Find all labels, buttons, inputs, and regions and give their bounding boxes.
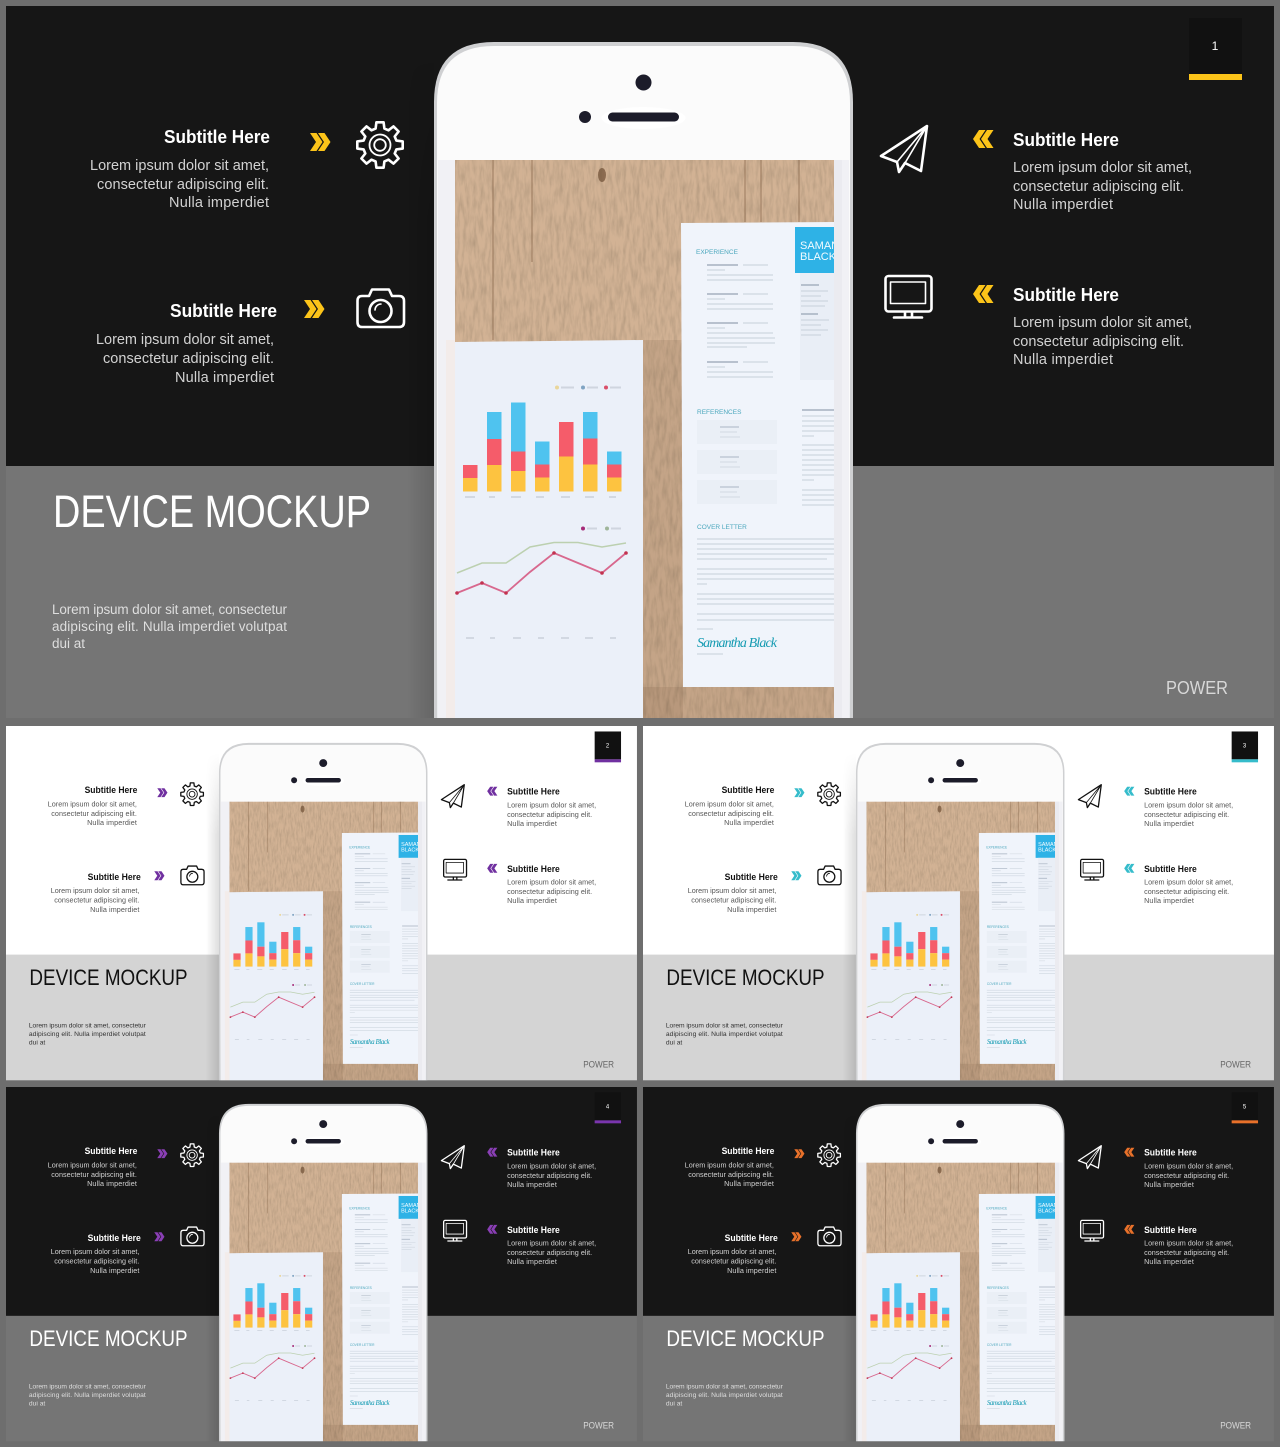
top dark band: [643, 1087, 1274, 1316]
feature: settings: Subtitle Here: [85, 1146, 137, 1156]
description: adipiscing elit. Nulla imperdiet volutpat: [29, 1031, 146, 1038]
brand label: POWER: [1166, 678, 1228, 698]
feature: settings: Nulla imperdiet: [87, 818, 137, 827]
feature: monitor: Subtitle Here: [1144, 864, 1197, 874]
feature: camera: [688, 866, 841, 914]
title: DEVICE MOCKUP: [53, 486, 371, 537]
page number tab: [1232, 731, 1258, 762]
description: adipiscing elit. Nulla imperdiet volutpat: [666, 1031, 783, 1038]
feature: monitor: Subtitle Here: [1144, 1225, 1197, 1235]
feature: monitor: Nulla imperdiet: [1144, 1257, 1194, 1266]
feature: settings: consectetur adipiscing elit.: [688, 809, 774, 818]
feature: camera: Lorem ipsum dolor sit amet,: [688, 1247, 776, 1256]
page number tab: [595, 731, 621, 762]
feature: paper plane: Nulla imperdiet: [507, 819, 557, 828]
feature: monitor: Nulla imperdiet: [1144, 896, 1194, 905]
page number tab: [1232, 1092, 1258, 1123]
phone mockup: [434, 42, 862, 722]
feature: settings: consectetur adipiscing elit.: [51, 809, 137, 818]
feature: camera: Lorem ipsum dolor sit amet,: [688, 886, 776, 895]
feature: paper plane: Subtitle Here: [1013, 130, 1119, 150]
bottom grey band: [643, 955, 1274, 1080]
brand label: POWER: [583, 1420, 615, 1430]
title: DEVICE MOCKUP: [666, 965, 825, 990]
description: adipiscing elit. Nulla imperdiet volutpat: [29, 1392, 146, 1399]
feature: monitor: consectetur adipiscing elit.: [507, 1248, 592, 1257]
panel: slide 1 large dark: [6, 6, 1274, 722]
feature: settings: Nulla imperdiet: [724, 1179, 774, 1188]
feature: camera: Lorem ipsum dolor sit amet,: [51, 886, 139, 895]
feature: settings: [48, 1144, 203, 1188]
description: dui at: [52, 636, 85, 651]
feature: monitor: [886, 276, 1192, 368]
description: [666, 1023, 784, 1046]
feature: camera: Subtitle Here: [725, 1233, 778, 1243]
feature: paper plane: consectetur adipiscing elit.: [507, 1171, 592, 1180]
feature: camera: consectetur adipiscing elit.: [103, 351, 274, 367]
feature: paper plane: [441, 1146, 596, 1189]
top dark band: [6, 6, 1274, 466]
phone mockup: [856, 743, 1069, 1081]
top white band: [6, 726, 637, 955]
feature: monitor: Lorem ipsum dolor sit amet,: [1013, 315, 1192, 331]
feature: settings: Subtitle Here: [722, 785, 774, 795]
feature: paper plane: Nulla imperdiet: [1144, 819, 1194, 828]
feature: camera: Nulla imperdiet: [727, 1266, 776, 1275]
panel: slide 5 dark orange: [643, 1087, 1274, 1442]
feature: monitor: consectetur adipiscing elit.: [1013, 334, 1184, 350]
bottom grey band: [643, 1316, 1274, 1441]
feature: monitor: Lorem ipsum dolor sit amet,: [507, 878, 596, 887]
feature: paper plane: consectetur adipiscing elit.: [1144, 1171, 1229, 1180]
description: [29, 1023, 147, 1046]
page number tab: 5: [1243, 1104, 1247, 1110]
feature: camera: Subtitle Here: [725, 872, 778, 882]
feature: camera: consectetur adipiscing elit.: [691, 1257, 776, 1266]
feature: paper plane: Nulla imperdiet: [1144, 1180, 1194, 1189]
title: DEVICE MOCKUP: [666, 1326, 825, 1351]
feature: monitor: Lorem ipsum dolor sit amet,: [1144, 1239, 1233, 1248]
page number tab: [595, 1092, 621, 1123]
feature: camera: consectetur adipiscing elit.: [691, 896, 776, 905]
feature: paper plane: Lorem ipsum dolor sit amet,: [507, 801, 596, 810]
page number tab: 2: [606, 743, 610, 749]
feature: monitor: [1081, 1220, 1233, 1266]
phone mockup: [856, 1104, 1069, 1442]
feature: settings: consectetur adipiscing elit.: [97, 177, 269, 193]
feature: camera: [688, 1227, 841, 1275]
feature: paper plane: consectetur adipiscing elit.: [507, 810, 592, 819]
feature: paper plane: [441, 785, 596, 828]
description: [666, 1384, 784, 1407]
description: dui at: [29, 1039, 45, 1046]
feature: settings: Subtitle Here: [722, 1146, 774, 1156]
brand label: POWER: [1220, 1420, 1252, 1430]
feature: paper plane: Lorem ipsum dolor sit amet,: [1144, 1162, 1233, 1171]
feature: monitor: consectetur adipiscing elit.: [507, 887, 592, 896]
panel: slide 2 light purple: [6, 726, 637, 1081]
feature: camera: Subtitle Here: [170, 301, 277, 321]
bottom grey band: [6, 466, 1274, 718]
feature: paper plane: Lorem ipsum dolor sit amet,: [1144, 801, 1233, 810]
description: Lorem ipsum dolor sit amet, consectetur: [29, 1023, 147, 1030]
feature: monitor: Subtitle Here: [507, 1225, 560, 1235]
feature: camera: Nulla imperdiet: [90, 1266, 139, 1275]
feature: monitor: [444, 1220, 596, 1266]
title: DEVICE MOCKUP: [29, 965, 188, 990]
feature: monitor: [1081, 859, 1233, 905]
feature: settings: Lorem ipsum dolor sit amet,: [685, 1161, 774, 1170]
phone mockup: [219, 1104, 432, 1442]
feature: settings: consectetur adipiscing elit.: [688, 1170, 774, 1179]
feature: paper plane: [881, 126, 1192, 213]
feature: paper plane: Subtitle Here: [1144, 1148, 1197, 1158]
feature: paper plane: Lorem ipsum dolor sit amet,: [507, 1162, 596, 1171]
feature: camera: consectetur adipiscing elit.: [54, 896, 139, 905]
description: Lorem ipsum dolor sit amet, consectetur: [29, 1384, 147, 1391]
page number tab: 3: [1243, 743, 1247, 749]
feature: camera: Nulla imperdiet: [175, 370, 274, 386]
feature: monitor: Subtitle Here: [507, 864, 560, 874]
feature: monitor: Nulla imperdiet: [1013, 352, 1113, 368]
feature: monitor: consectetur adipiscing elit.: [1144, 1248, 1229, 1257]
bottom grey band: [6, 955, 637, 1080]
feature: paper plane: Lorem ipsum dolor sit amet,: [1013, 160, 1192, 176]
panel: slide 3 light teal: [643, 726, 1274, 1081]
feature: paper plane: Subtitle Here: [507, 1148, 560, 1158]
description: dui at: [666, 1039, 682, 1046]
feature: camera: Subtitle Here: [88, 1233, 141, 1243]
feature: monitor: Lorem ipsum dolor sit amet,: [1144, 878, 1233, 887]
feature: settings: Subtitle Here: [85, 785, 137, 795]
feature: camera: [51, 866, 204, 914]
top white band: [643, 726, 1274, 955]
feature: camera: Lorem ipsum dolor sit amet,: [51, 1247, 139, 1256]
feature: settings: Lorem ipsum dolor sit amet,: [685, 800, 774, 809]
description: adipiscing elit. Nulla imperdiet volutpat: [666, 1392, 783, 1399]
feature: settings: [48, 783, 203, 827]
feature: settings: Lorem ipsum dolor sit amet,: [90, 158, 269, 174]
feature: camera: Lorem ipsum dolor sit amet,: [96, 332, 274, 348]
feature: monitor: [444, 859, 596, 905]
description: Lorem ipsum dolor sit amet, consectetur: [666, 1023, 784, 1030]
description: Lorem ipsum dolor sit amet, consectetur: [52, 602, 288, 617]
brand label: POWER: [1220, 1059, 1252, 1069]
feature: paper plane: [1078, 785, 1233, 828]
feature: camera: Subtitle Here: [88, 872, 141, 882]
feature: settings: consectetur adipiscing elit.: [51, 1170, 137, 1179]
phone shadow: [422, 466, 434, 718]
title: DEVICE MOCKUP: [29, 1326, 188, 1351]
page number tab: [1189, 18, 1242, 80]
feature: paper plane: Nulla imperdiet: [507, 1180, 557, 1189]
feature: settings: Lorem ipsum dolor sit amet,: [48, 800, 137, 809]
description: dui at: [29, 1400, 45, 1407]
description: [52, 602, 288, 651]
feature: paper plane: [1078, 1146, 1233, 1189]
feature: paper plane: Nulla imperdiet: [1013, 197, 1113, 213]
page number tab: 4: [606, 1104, 610, 1110]
description: Lorem ipsum dolor sit amet, consectetur: [666, 1384, 784, 1391]
feature: monitor: consectetur adipiscing elit.: [1144, 887, 1229, 896]
phone shadow: [850, 1316, 856, 1441]
description: dui at: [666, 1400, 682, 1407]
phone shadow: [213, 1316, 219, 1441]
feature: settings: Subtitle Here: [164, 127, 270, 147]
feature: paper plane: Subtitle Here: [507, 787, 560, 797]
feature: settings: Nulla imperdiet: [724, 818, 774, 827]
brand label: POWER: [583, 1059, 615, 1069]
feature: settings: [90, 122, 403, 211]
description: adipiscing elit. Nulla imperdiet volutpat: [52, 619, 287, 634]
phone mockup: [219, 743, 432, 1081]
panel: slide 4 dark purple: [6, 1087, 637, 1442]
feature: camera: consectetur adipiscing elit.: [54, 1257, 139, 1266]
feature: camera: Nulla imperdiet: [90, 905, 139, 914]
feature: monitor: Lorem ipsum dolor sit amet,: [507, 1239, 596, 1248]
feature: settings: Nulla imperdiet: [169, 195, 269, 211]
bottom grey band: [6, 1316, 637, 1441]
feature: monitor: Subtitle Here: [1013, 285, 1119, 305]
feature: paper plane: consectetur adipiscing elit.: [1013, 179, 1184, 195]
feature: settings: [685, 783, 840, 827]
feature: paper plane: Subtitle Here: [1144, 787, 1197, 797]
page number tab: 1: [1212, 39, 1219, 53]
description: [29, 1384, 147, 1407]
feature: camera: [51, 1227, 204, 1275]
feature: paper plane: consectetur adipiscing elit.: [1144, 810, 1229, 819]
feature: monitor: Nulla imperdiet: [507, 1257, 557, 1266]
top dark band: [6, 1087, 637, 1316]
feature: settings: [685, 1144, 840, 1188]
phone shadow: [846, 775, 856, 1080]
feature: camera: [96, 290, 404, 386]
feature: monitor: Nulla imperdiet: [507, 896, 557, 905]
feature: settings: Lorem ipsum dolor sit amet,: [48, 1161, 137, 1170]
phone shadow: [210, 775, 219, 1080]
feature: camera: Nulla imperdiet: [727, 905, 776, 914]
feature: settings: Nulla imperdiet: [87, 1179, 137, 1188]
